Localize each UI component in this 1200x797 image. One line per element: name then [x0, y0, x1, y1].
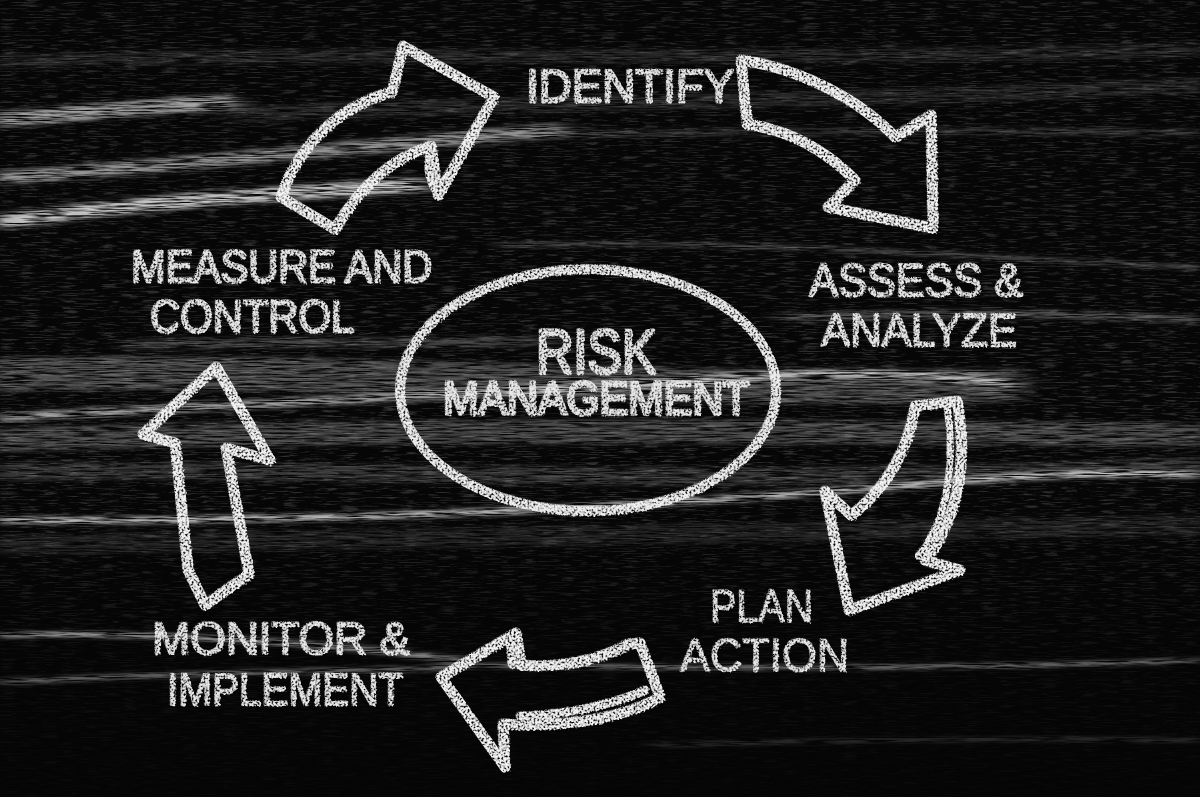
- label: monitor and implement: IMPLEMENT: [167, 664, 403, 715]
- label: measure and control: [131, 241, 432, 342]
- label: measure and control: MEASURE AND: [131, 241, 432, 292]
- label: identify: IDENTIFY: [526, 60, 734, 112]
- label: monitor and implement: MONITOR &: [152, 613, 410, 664]
- label: monitor and implement: [152, 613, 410, 715]
- arrow: assess and analyze to plan action: [825, 401, 961, 610]
- arrow: monitor and implement to measure and control: [143, 367, 270, 605]
- label: assess and analyze: [809, 254, 1023, 356]
- center ellipse: [400, 269, 776, 511]
- arrow: measure and control to identify: [281, 46, 494, 229]
- arrow: identify to assess and analyze: [741, 60, 933, 228]
- label: assess and analyze: ANALYZE: [821, 304, 1017, 356]
- label: measure and control: CONTROL: [150, 291, 354, 342]
- label: plan action: ACTION: [680, 629, 849, 681]
- label: risk management: MANAGEMENT: [443, 372, 749, 424]
- arrow: plan action to monitor and implement: [441, 633, 660, 767]
- label: plan action: PLAN: [710, 580, 813, 632]
- label: plan action: [680, 580, 849, 681]
- label: risk management: [443, 318, 749, 424]
- label: risk management: RISK: [536, 318, 656, 387]
- label: assess and analyze: ASSESS &: [809, 254, 1023, 306]
